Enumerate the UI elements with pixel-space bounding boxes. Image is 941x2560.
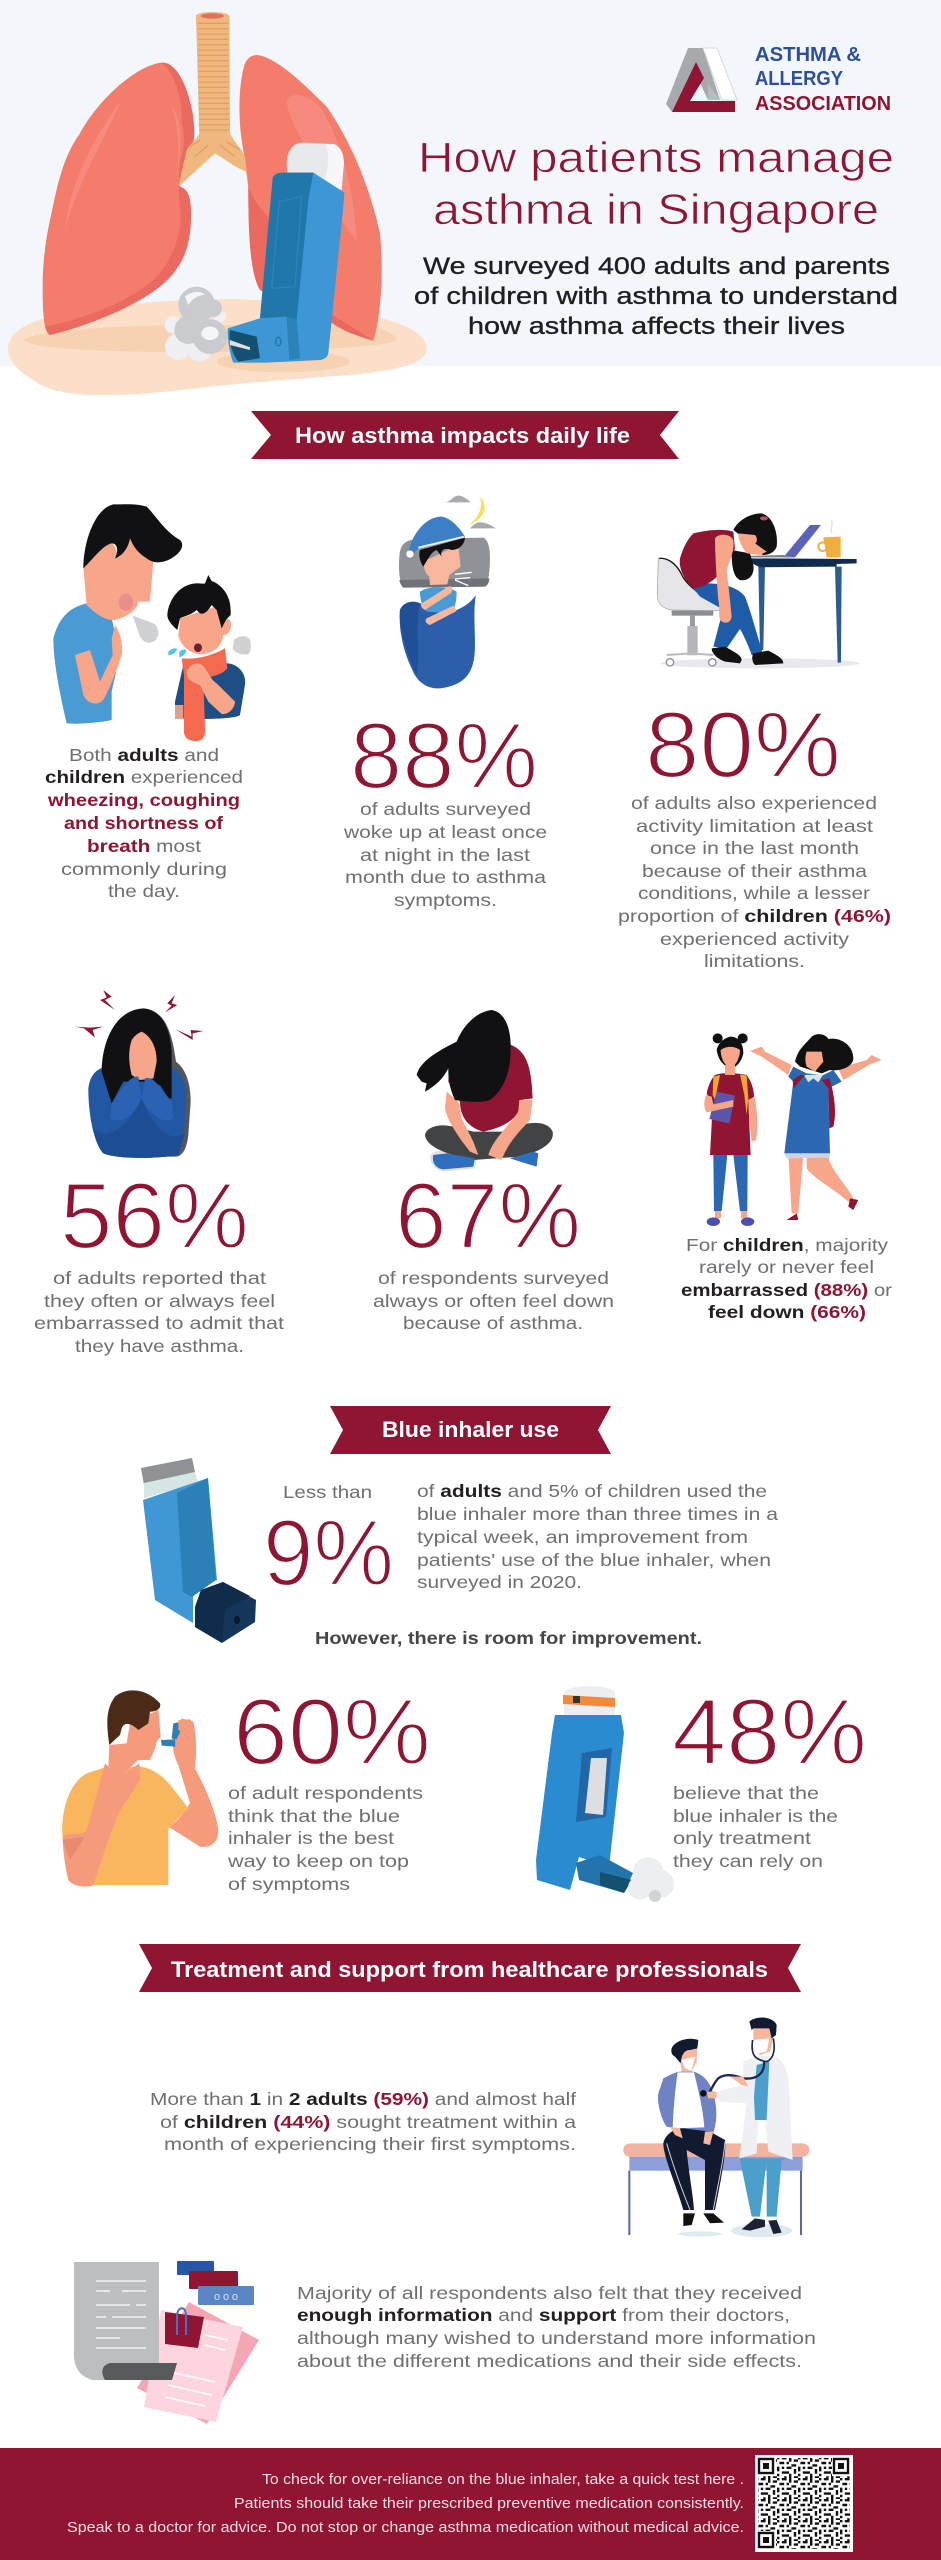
night text: at night in the last xyxy=(360,845,530,865)
children text xyxy=(681,1235,892,1322)
statistic 9%: 9% xyxy=(263,1500,394,1605)
embarrassed text: they often or always feel xyxy=(44,1291,275,1311)
treatment text xyxy=(150,2089,576,2154)
symptoms text: the day. xyxy=(108,881,180,901)
illustration: doctor and patient xyxy=(623,2018,809,2237)
inhaler use text: blue inhaler more than three times in a xyxy=(417,1504,778,1524)
children text: feel down (66%) xyxy=(708,1302,866,1322)
woman xyxy=(713,610,742,648)
section banner: blue inhaler use: Blue inhaler use xyxy=(382,1417,559,1442)
feel down text: of respondents surveyed xyxy=(378,1268,609,1288)
statistic 56%: 56% xyxy=(60,1163,249,1268)
windpipe xyxy=(178,12,247,187)
embarrassed text xyxy=(34,1268,284,1356)
symptoms text: and shortness of xyxy=(64,813,223,833)
logo: Asthma & Allergy Association: ALLERGY xyxy=(755,68,844,90)
symptoms text: commonly during xyxy=(61,859,227,879)
illustration: embarrassed woman xyxy=(75,990,203,1158)
inhaler xyxy=(228,143,344,363)
QR code xyxy=(755,2455,853,2552)
panel: 88 percent woke at night xyxy=(343,496,547,910)
moon xyxy=(468,497,485,525)
symptoms text xyxy=(45,745,243,901)
panel: 9 percent inhaler use xyxy=(141,1458,778,1643)
information text: enough information and support from their doctors, xyxy=(297,2305,790,2325)
girl one xyxy=(704,1033,757,1226)
illustration: inhaler with puff xyxy=(536,1686,674,1902)
embarrassed text: of adults reported that xyxy=(53,1268,266,1288)
logo: Asthma & Allergy Association xyxy=(666,44,891,115)
subtitle: how asthma affects their lives xyxy=(468,313,845,340)
child xyxy=(167,575,251,741)
statistic 88%: 88% xyxy=(350,703,538,808)
only treatment text: only treatment xyxy=(673,1828,811,1848)
night text: of adults surveyed xyxy=(360,799,531,819)
logo mark xyxy=(666,48,737,112)
feel down text: always or often feel down xyxy=(373,1291,614,1311)
girl two xyxy=(750,1034,882,1220)
smoke xyxy=(165,287,227,362)
activity text: experienced activity xyxy=(660,929,849,949)
statistic 67%: 67% xyxy=(395,1163,581,1268)
night text: month due to asthma xyxy=(345,867,546,887)
inhaler use text: of adults and 5% of children used the xyxy=(417,1481,767,1501)
footer notes: Patients should take their prescribed preventive medication consistently. xyxy=(234,2496,744,2512)
activity text: once in the last month xyxy=(650,838,859,858)
treatment text: month of experiencing their first symptoms. xyxy=(164,2134,576,2154)
only treatment text: believe that the xyxy=(673,1783,819,1803)
night text xyxy=(343,799,547,910)
feel down text xyxy=(373,1268,614,1333)
subtitle xyxy=(414,253,898,340)
panel: information and support xyxy=(74,2261,816,2424)
illustration: lungs and inhaler xyxy=(8,12,427,395)
footer notes: To check for over-reliance on the blue inhaler, take a quick test here . xyxy=(262,2472,744,2488)
illustration: documents and chat bubbles: ooo xyxy=(214,2291,238,2303)
only treatment text: they can rely on xyxy=(673,1851,823,1871)
right lung xyxy=(239,55,382,341)
logo: Asthma & Allergy Association: ASSOCIATION xyxy=(755,93,891,115)
clouds xyxy=(446,496,496,528)
best way text: inhaler is the best xyxy=(228,1828,394,1848)
children text: For children , majority xyxy=(686,1235,888,1255)
footer notes xyxy=(67,2472,744,2536)
illustration: tired woman at desk xyxy=(657,513,860,668)
section banner: treatment and support: Treatment and support from healthcare professionals xyxy=(171,1957,768,1982)
stress bolts xyxy=(75,990,203,1040)
breath puff, adult xyxy=(133,616,158,643)
activity text: conditions, while a lesser xyxy=(638,883,870,903)
inhaler use text: patients' use of the blue inhaler, when xyxy=(417,1550,771,1570)
statistic 60%: 60% xyxy=(233,1679,431,1784)
inhaler use text: surveyed in 2020. xyxy=(417,1572,582,1592)
statistic 80%: 80% xyxy=(645,692,841,797)
best way text: think that the blue xyxy=(228,1806,400,1826)
night text: woke up at least once xyxy=(343,822,547,842)
panel: 80 percent activity limitation xyxy=(618,513,891,971)
treatment text: More than 1 in 2 adults (59%) and almost half xyxy=(150,2089,576,2109)
illustration: seated sad woman xyxy=(417,1010,553,1172)
activity text: of adults also experienced xyxy=(631,793,877,813)
symptoms text: breath most xyxy=(87,836,201,856)
best way text: of adult respondents xyxy=(228,1783,423,1803)
panel: 56 percent embarrassed xyxy=(34,990,284,1356)
footer notes: Speak to a doctor for advice. Do not stop or change asthma medication without medical advice. xyxy=(67,2520,744,2536)
section banner: treatment and support xyxy=(139,1944,801,1992)
header background xyxy=(0,0,941,366)
panel: 60 percent best way xyxy=(62,1679,431,1894)
panel: 67 percent feel down xyxy=(373,1010,614,1333)
children text: rarely or never feel xyxy=(699,1257,874,1277)
symptoms text: wheezing, coughing xyxy=(47,790,240,810)
callout: room for improvement: However, there is room for improvement. xyxy=(315,1628,702,1648)
best way text: way to keep on top xyxy=(227,1851,409,1871)
footer xyxy=(0,2448,941,2560)
symptoms text: children experienced xyxy=(45,767,243,787)
lung shadow xyxy=(24,325,397,352)
illustration: documents and chat bubbles xyxy=(74,2261,259,2424)
label: less than: Less than xyxy=(283,1482,372,1502)
activity text: limitations. xyxy=(704,951,805,971)
treatment text: of children (44%) sought treatment within a xyxy=(160,2112,576,2132)
best way text xyxy=(227,1783,423,1894)
panel: children feelings xyxy=(681,1033,892,1322)
embarrassed text: embarrassed to admit that xyxy=(34,1313,284,1333)
patient xyxy=(658,2039,725,2226)
activity text xyxy=(618,793,891,971)
information text: about the different medications and their side effects. xyxy=(297,2351,802,2371)
peach base xyxy=(8,299,427,395)
only treatment text: blue inhaler is the xyxy=(673,1806,838,1826)
feel down text: because of asthma. xyxy=(403,1313,583,1333)
illustration: two school girls xyxy=(704,1033,882,1226)
section banner: how asthma impacts daily life: How asthma impacts daily life xyxy=(295,423,630,448)
statistic 48%: 48% xyxy=(672,1679,867,1784)
children text: embarrassed (88%) or xyxy=(681,1280,892,1300)
title: asthma in Singapore xyxy=(433,186,879,234)
section banner: blue inhaler use xyxy=(330,1406,611,1454)
information text: although many wished to understand more information xyxy=(297,2328,816,2348)
night text: symptoms. xyxy=(394,890,497,910)
illustration: man using inhaler xyxy=(62,1690,218,1887)
illustration: man and child coughing xyxy=(53,504,251,741)
inhaler use text: typical week, an improvement from xyxy=(417,1527,748,1547)
title xyxy=(418,134,894,234)
best way text: of symptoms xyxy=(228,1874,350,1894)
subtitle: of children with asthma to understand xyxy=(414,283,898,310)
logo text: ASTHMA & xyxy=(755,44,861,66)
desk xyxy=(744,558,857,663)
embarrassed text: they have asthma. xyxy=(75,1336,244,1356)
activity text: because of their asthma xyxy=(642,861,867,881)
inhaler use text xyxy=(417,1481,778,1592)
information text xyxy=(297,2283,816,2371)
information text: Majority of all respondents also felt that they received xyxy=(297,2283,802,2303)
section banner: how asthma impacts daily life xyxy=(251,411,679,459)
activity text: proportion of children (46%) xyxy=(618,906,891,926)
illustration: blue inhaler xyxy=(141,1458,256,1643)
panel: adults and children symptoms xyxy=(45,504,251,901)
doctor xyxy=(700,2018,793,2234)
illustration: sleeping man xyxy=(399,496,496,688)
subtitle: We surveyed 400 adults and parents xyxy=(423,253,890,280)
title: How patients manage xyxy=(418,134,894,182)
panel: 48 percent only treatment xyxy=(536,1679,867,1902)
panel: seeking treatment xyxy=(150,2018,809,2237)
activity text: activity limitation at least xyxy=(636,816,873,836)
symptoms text: Both adults and xyxy=(69,745,219,765)
left lung xyxy=(43,63,194,335)
only treatment text xyxy=(673,1783,838,1871)
